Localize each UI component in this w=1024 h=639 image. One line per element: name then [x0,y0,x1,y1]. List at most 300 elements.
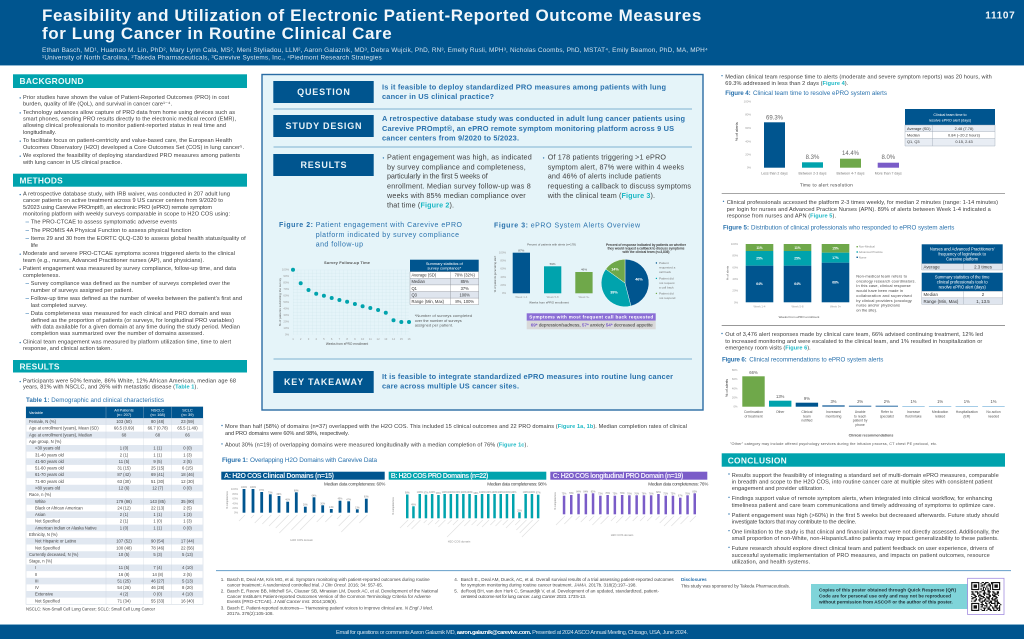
chart: time to alert resolution: 100% [744,100,751,104]
disclosures [681,577,790,589]
chart: B H2O COS PRO domains: 100% [460,491,467,494]
chart: clinical recommendations: of treatment [744,414,763,418]
chart: A H2O COS clinical domains: 20% [232,506,239,510]
references: left column: Basch E, Deal AM, Kris MG, et al. Symptom monitoring with patient-reported outcomes during routine [227,577,430,582]
note: non-medical team [856,274,916,312]
table column: SCLC: 16 (40) [181,598,195,603]
results text: left bullet: that time (Figure 2). [387,201,454,210]
results text: right bullet: Of 178 patients triggering >1 ePRO [548,153,666,162]
chart: survey follow-up time: % of patients submitting the survey [278,278,282,326]
figure 5 title: Figure 5: [723,225,749,232]
bullet text: conclusion: Patient engagement was high (>60%) in the first 5 weeks but decreased afterwards. Future study should [732,513,999,519]
chart: survey follow-up time [278,260,411,346]
table: time to resolve alert: 2.48 (7.78) [955,126,974,131]
chart: callback pie: with the clinical team (n=3,836) [622,250,670,254]
bullet text: methods: Moderate and severe PRO-CTCAE symptoms scores triggered alerts to the clinical [23,251,235,257]
bullet text: methods: Patient engagement was measured by survey compliance, follow-up time, and data [23,266,237,272]
table row labels: I [35,565,36,570]
text block: domain overlap: About 30% (n=19) of overlapping domains were measured longitudinally with a median completion of 76% (Figure 1c). [225,442,528,448]
table column: all patients: 179 (86) [116,499,132,504]
chart: clinical professionals stacked bars: 100% [731,242,739,246]
chart: A H2O COS clinical domains: 46% [285,499,291,502]
figure 1 title: Overlapping H2O Domains with Carevive Data [250,457,377,464]
references: right column: centered outcome set for lung cancer. Lung Cancer 2023. 173:5-13. [461,594,586,599]
chart: A H2O COS clinical domains: Median data completeness: 60% [324,482,385,486]
chart: clinical recommendations: 2% [884,399,890,404]
chart: clinical recommendations: Increased [826,410,841,414]
table row labels: American Indian or Alaska Native [35,525,97,530]
table row labels: Ethnicity, N (%) [29,532,58,537]
table row labels: 71-80 years old [35,479,65,484]
chart: C H2O COS longitudinal PRO domain: 76% [685,492,691,495]
panel: background [13,74,247,166]
chart: percent of patients with alerts: 20% [500,283,507,287]
stacked bar legend: Non-Medical [859,245,875,249]
table column: SCLC: 66 [185,432,190,437]
callout: QR copies notice [811,584,968,609]
chart: time to alert resolution: Between 2-3 days [798,172,827,176]
table column: all patients: 87 (42) [117,472,131,477]
table: survey compliance summary [410,260,479,305]
label: results: RESULTS [300,160,346,170]
chart: time to alert resolution: Less than 2 days [761,172,788,176]
bullet text: background: burden, quality of life (QoL), and survival in cancer care¹⁻⁴. [23,100,172,108]
bullet text: conclusion [728,473,999,566]
chart: clinical recommendations: Continuation [744,410,763,414]
chart: B H2O COS PRO domains: 100% [448,491,455,494]
bullet text: methods: Items 29 and 30 from the EORTC QLQ-C30 to assess global health status/quality of [31,236,246,242]
table column: NSCLC: 80 (48) [151,419,165,424]
table column: NSCLC: 22 (13) [151,505,165,510]
table column: all patients: 63 (30) [117,479,131,484]
figure 2 title: Patient engagement with Carevive ePRO [316,222,463,229]
bullet text: conclusion: timeliness patient and care team communications and timely addressing of symptoms to optimize care. [732,503,995,509]
study design text [382,114,685,142]
table header row: (n= 39) [181,412,194,417]
chart: survey follow-up time: 7 [339,337,341,341]
figure 6 footnote: "Other" category may include offered psychology services during the infusion process, CT chest PE protocol, etc. [730,442,937,446]
study design text: Carevive PROmpt®, an ePRO remote symptom monitoring platform across 9 US [382,124,674,133]
table row labels: III [35,578,38,584]
table 1: demographics [26,407,203,604]
chart: clinical recommendations: team [803,414,811,418]
note: non-medical team: would have been made in [856,288,903,293]
references: left column: 1. [221,577,225,582]
chart: A H2O COS clinical domains: H2O COS domain [290,538,313,542]
bullet text: methods: monitoring platform with weekly surveys comparable in scope to H2O COS using: [23,212,230,218]
results text: left bullet: particularly in the first 5 weeks of [387,172,488,181]
table column: NSCLC: 1 (0) [153,519,163,524]
table footnote: NSCLC: Non-Small Cell Lung Cancer; SCLC: Small Cell Lung Cancer [26,606,156,611]
table row labels: IV [35,585,39,590]
note: non-medical team: nurse and/or physicians [856,303,900,308]
pie legend: a call back [659,285,674,289]
table row labels: 41-50 years old [35,459,65,464]
note: non-medical team: on the site). [856,307,877,312]
text block: domain overlap: and PRO domains were 60% and 98%, respectively. [225,431,349,437]
callout: symptoms with most frequent call back: Symptoms with most frequent call back requested [529,315,653,320]
chart: clinical professionals stacked bars [726,242,883,319]
chart: A H2O COS clinical domains: 13% [355,506,361,509]
chart: clinical recommendations: Refer to [881,410,893,414]
table column: SCLC: 12 (30) [181,479,195,484]
bullet text: methods: life [31,243,38,249]
text block: domain overlap: More than half (58%) of domains (n=37) overlapped with the H2O COS. This included 15 clinical outcomes and 22 PRO domains (Figure 1a, 1b). Median completion rates of clinical [225,424,687,430]
bullet text: results: years, 81% with NSCLC, and 26% with metastatic disease (Table 1). [23,384,198,390]
chart: clinical professionals stacked bars: Weeks From ePRO enrollment [779,315,820,319]
label: key takeaway: KEY TAKEAWAY [284,377,363,387]
references: left column: Events (PRO-CTCAE). J Natl Cancer Inst. 2014;106(9). [227,599,337,604]
bullet text: methods: team (e.g., nurses, Advanced Practitioner nurses (AP), and physicians). [23,258,204,264]
chart: time to alert resolution: 8.3% [806,155,820,161]
table column: all patients: 2 (1) [120,519,129,524]
chart: A H2O COS clinical domains: 100% [241,486,248,489]
disclosures: This study was sponsored by Takeda Pharmaceuticals. [681,584,790,589]
text block: alert responses: emergency room visits (Figure 6). [725,346,811,352]
chart: time to alert resolution [734,100,902,187]
table header row: (n= 207) [117,412,132,417]
bullet text: methods: Survey compliance was defined as the number of surveys completed over the [31,281,230,287]
table column: NSCLC: 7 (4) [153,565,163,570]
chart: B H2O COS PRO domains: 100% [504,491,511,494]
header banner [0,0,1024,66]
panel: results [13,360,247,611]
chart: clinical professionals stacked bars: 80% [732,254,739,258]
results text: left bullet: enrollment. Median survey follow-up was 8 [387,181,531,190]
chart: A H2O COS clinical domains: 49% [338,498,343,501]
references: left column: cancer treatment: A randomized controlled trial. J Clin Oncol. 2016; 34: 557-65. [227,582,383,588]
chart: percent of patients with alerts: 80% [500,258,507,262]
panel: central summary [262,74,703,410]
bullet text: methods: completion was summarized over the number of domains assessed. [31,331,204,337]
chart: survey follow-up time: 13 [384,337,388,341]
bullet text: background: We explored the feasibility of deploying standardized PRO measures among patients [23,153,240,159]
table column: NSCLC: 0 (0) [153,592,163,597]
figure 4 title: Figure 4: [725,90,751,97]
chart: survey follow-up time: 16 [407,337,411,341]
table column: NSCLC: 12 (7) [152,486,164,490]
bullet text: conclusion: in breadth and scope to the H2O COS, into routine cancer care at multiple sites with consistent patient [732,480,993,486]
note: non-medical team: In this case, clinical response [856,283,911,288]
bullet text: background: Outcomes Observatory (H2O) developed a Core Outcomes Set (COS) in lung cancer⁵. [23,144,244,151]
chart: time to alert resolution: 0% [747,166,751,170]
table: time to resolve alert, clinical professionals: resolve ePRO alert (days) [939,284,986,289]
references: right column: 4. [454,577,458,582]
label: key takeaway [273,371,374,393]
chart: B H2O COS PRO domains: 49% [411,503,417,506]
question text: Is it feasible to deploy standardized PRO measures among patients with lung [382,82,666,92]
table row labels: Not Specified [35,598,61,603]
results text: left bullet [383,153,532,210]
chart: C H2O COS longitudinal PRO domain: 76% [642,492,647,495]
table: survey compliance summary: Range (Min, Max) [412,299,445,304]
table column: NSCLC: 46 (28) [151,585,165,590]
chart: time to alert resolution: 69.3% [766,115,784,121]
bullet text: methods: number of surveys assigned per patient. [31,288,133,294]
chart: C H2O COS longitudinal PRO domain: 78% [569,492,575,495]
table header row: Variable [29,410,43,415]
table column: all patients: 66.5 (0.69) [114,426,135,431]
chart: C H2O COS longitudinal PRO domain: C: H2O COS longitudinal PRO Domain (n=19) [553,473,683,480]
pie legend: not respond [659,296,676,300]
question text: cancer in US clinical practice? [382,92,494,101]
chart: survey follow-up time: 9 [354,337,356,341]
chart: time to alert resolution: More than 7 days [875,172,902,176]
chart: percent of patients with alerts: Week 5-8 [547,295,559,299]
chart: clinical professionals stacked bars: % of alerts [726,265,730,280]
callout: QR copies notice: Code are for personal use only and may not be reproduced [819,594,951,599]
table column: all patients: 12 (6) [119,486,130,490]
chart: clinical recommendations: Increase [907,410,920,414]
table: time to resolve alert [905,109,995,146]
chart: callback pie: Percent of response indicated by patients on whether [606,243,687,247]
references: right column: 5. [454,588,458,594]
chart: A H2O COS clinical domains: 64% [312,494,317,497]
chart: B H2O COS PRO domains: 97% [536,492,541,495]
chart: callback pie [601,243,687,307]
table column: SCLC: 2 (5) [183,505,192,510]
figure 6 title: Figure 6: [722,356,747,363]
chart: A H2O COS clinical domains: 100% [250,486,257,489]
references: left column: Basch E. Patient-reported outcomes— 'Harnessing patient' voices to improve clinical are. N Engl J Med. [227,606,433,610]
table column: SCLC: 5 (13) [182,552,194,557]
chart: time to alert resolution: 14.4% [842,151,860,157]
chart: survey follow-up time: 8 [346,337,348,341]
chart: B H2O COS PRO domains: H2O COS domain [448,539,471,543]
callout: QR copies notice: Copies of this poster obtained through Quick Response (QR) [819,588,956,593]
chart: percent of patients with alerts: Percent of patients with alerts (n=178) [527,242,576,246]
chart: B H2O COS PRO domains: 96% [436,492,442,495]
chart: C H2O COS longitudinal PRO domain: Median data completeness: 76% [648,482,708,486]
chart: B H2O COS PRO domains: 100% [498,491,505,494]
table column: SCLC: 17 (44) [181,539,195,544]
chart: clinical recommendations: specialist [880,414,894,418]
bullet text: methods: Data completeness was measured for each clinical and PRO domain and was [31,311,231,317]
callout: QR copies notice: without permission from ASCO® or the author of this poster. [818,598,953,604]
chart: clinical recommendations: 2% [857,399,863,404]
heading: conclusion: CONCLUSION [728,455,787,465]
study design text: cancer centers from 9/2020 to 5/2023. [382,134,519,142]
figure 2 title: platform indicated by survey compliance [316,232,459,239]
chart: survey follow-up time: 3 [308,337,310,341]
table column: SCLC: 0 (0) [183,486,192,490]
chart: clinical recommendations: notified [801,419,812,423]
chart: time to alert resolution: 40% [745,139,751,143]
results text: right bullet [543,153,691,200]
note: non-medical team: oncology research coordinators. [856,278,916,283]
table row labels: 61-70 years old [35,472,65,477]
study design text: A retrospective database study was conducted in adult lung cancer patients using [382,114,685,123]
table: survey compliance summary: 8%, 100% [455,299,474,304]
chart: A H2O COS clinical domains: 47% [346,498,352,501]
table: survey compliance summary: 100% [459,292,470,297]
chart: C H2O COS longitudinal PRO domain: 75% [671,493,676,496]
table column: all patients: 31 (15) [117,466,131,471]
table column: all patients: 68 [122,432,127,437]
chart: A H2O COS clinical domains: 26% [303,504,309,507]
text block: clinical professionals [723,200,998,220]
bullet text: results [20,378,236,390]
table column: NSCLC: 14 (8) [152,572,164,577]
chart: survey follow-up time: 1 [292,337,294,341]
chart: clinical professionals stacked bars: Week 9+ [830,304,841,308]
label: question: QUESTION [297,87,350,97]
table row labels: Black or African American [35,505,83,510]
chart: C H2O COS longitudinal PRO domain: 75% [613,493,618,496]
chart: B H2O COS PRO domains: 97% [424,492,429,495]
poster number: 11107 [985,10,1015,22]
bullet text: conclusion: One limitation to the study is that clinical and financial impact were not directly assessed. Additionally, the [732,530,999,536]
chart: clinical professionals stacked bars: 25% [794,257,801,261]
chart: survey follow-up time: 6 [331,337,333,341]
table column: SCLC: 5 (13) [182,578,194,584]
chart: clinical professionals stacked bars: 68% [832,281,839,285]
table: login frequency: Average [924,264,940,269]
chart: clinical recommendations: Hospitalization [956,410,978,414]
chart: survey follow-up time: 11 [369,337,372,341]
title: Feasibility and Utilization of Electronic Patient-Reported Outcome Measures [42,6,701,25]
survey compliance footnote [415,313,472,328]
pie legend [656,261,676,300]
stacked bar legend: Advanced Practice [859,250,883,254]
table row labels: >80 years old [35,486,61,490]
table column: SCLC: 18 (46) [181,472,195,477]
chart: clinical professionals stacked bars: 20% [732,289,739,293]
chart: clinical recommendations: 20% [732,396,738,400]
table column: all patients: 16 (8) [119,572,130,577]
chart: survey follow-up time: 80% [283,281,290,285]
bullet text: methods: with data available for a given domain at any time during the study period. Median [30,324,240,330]
chart: clinical professionals stacked bars: Week 1-4 [754,304,766,308]
key takeaway text: care across multiple US cancer sites. [382,382,519,390]
chart: B H2O COS PRO domains: 100% [429,491,436,494]
heading: methods: METHODS [20,175,63,185]
chart: clinical recommendations: needed [988,414,999,418]
chart: B H2O COS PRO domains: 100% [492,491,499,494]
chart: clinical professionals stacked bars: 17% [832,256,839,260]
chart: A H2O COS clinical domains: 80% [232,492,239,496]
label: results [273,154,374,176]
table: login frequency [922,244,1003,270]
chart: clinical recommendations: phone [855,423,865,427]
table: login frequency: Nurses and Advanced Practitioners' [930,246,995,251]
chart: clinical professionals stacked bars: 15% [832,247,839,251]
chart: C H2O COS longitudinal PRO domain: 85% [591,490,596,493]
table row labels: 51-60 years old [35,466,65,471]
chart: clinical recommendations: 80% [732,368,738,372]
chart: B H2O COS PRO domains: 100% [454,491,461,494]
chart: survey follow-up time: 0% [285,333,290,337]
figure 2 title [279,222,463,248]
chart: C H2O COS longitudinal PRO domain: 67% [678,495,684,498]
chart: time to alert resolution: 20% [745,153,751,157]
disclosures: Disclosures [681,577,707,582]
table column: SCLC [177,419,198,603]
table: time to resolve alert: Median [907,132,920,137]
chart: survey follow-up time: Survey Follow-up Time [324,260,371,265]
chart: time to alert resolution: 8.0% [881,155,896,161]
pie legend: requested a [659,266,676,270]
chart: B H2O COS PRO domains: 100% [510,491,517,494]
footer contact text: Email for questions or comments Aaron Galaznik MD, aaron.galaznik@carevive.com. Presented at 2024 ASCO Annual Meeting, Chicago, USA, June 2024. [336,630,688,636]
chart: percent of patients with alerts: Weeks from ePRO enrollment [529,300,569,304]
table: time to resolve alert, clinical professionals [922,273,1003,304]
table column: all patients: 11 (5) [119,459,130,464]
chart: survey follow-up time: 10 [361,337,365,341]
key takeaway text: It is feasible to integrate standardized ePRO measures into routine lung cancer [382,372,673,381]
table column: all patients: 1 (0) [120,446,129,451]
table column: NSCLC: 51 (30) [151,479,165,484]
chart: time to alert resolution: Time to alert resolution [800,182,853,187]
table: time to resolve alert, clinical professionals: 1, 13.5 [976,299,990,304]
table column: NSCLC: 66.7 (0.78) [148,426,168,431]
references: left column: 2. [221,588,225,594]
chart: clinical recommendations: Clinical recommendations [849,433,893,437]
table: time to resolve alert: Clinical team time to [933,113,967,117]
table header row: (n= 168) [150,412,166,417]
figure 6 title: Clinical recommendations to ePRO system alerts [749,356,883,363]
text block: response time [721,74,992,87]
chart: percent of patients with alerts: Week 1-4 [515,295,528,299]
table column: SCLC: 0 (0) [183,525,192,530]
table: survey compliance summary: Q3 [412,292,418,297]
table row labels: <30 years old [35,446,61,451]
chart: clinical recommendations: monitoring [826,414,842,418]
bullet text: methods: A retrospective database study, with IRB waiver, was conducted in 207 adult lung [23,192,230,198]
text block: alert responses [721,332,983,352]
chart: survey follow-up time: 70% [283,287,290,291]
chart: callback pie: they would request a callback to discuss symptoms [608,247,685,251]
chart: C H2O COS longitudinal PRO domain [550,472,708,537]
chart: B H2O COS PRO domains: 100% [529,491,536,494]
table column: SCLC: 1 (3) [183,452,192,457]
table: time to resolve alert: 0.84 (~20.2 hours) [948,132,981,137]
chart: B H2O COS PRO domains: Median data completeness: 98% [487,482,547,486]
bullet text: methods: defined as the proportion of patients (or surveys, for longitudinal PRO variables) [31,318,234,324]
bullet text: methods: completeness. [23,273,60,279]
table: survey compliance summary: 37% [461,286,469,291]
table: time to resolve alert, clinical professionals: clinical professionals took to [937,280,988,284]
table column: NSCLC [148,419,168,603]
survey compliance footnote: over the number of surveys [415,318,462,323]
chart: clinical professionals stacked bars: Week 5-8 [792,304,804,308]
chart: survey follow-up time: 20% [283,320,290,324]
table column: SCLC: 65.5 (1.49) [177,426,198,431]
table: survey compliance summary: Summary statistics of [426,261,464,266]
chart: B H2O COS PRO domains: 100% [485,491,492,494]
chart: survey follow-up time: 10% [283,326,290,330]
authors and affiliations: ¹University of North Carolina, ²Takeda Pharmaceuticals, ³Carevive Systems, Inc., ⁴Piedmont Research Strategies [42,55,382,62]
chart: percent of patients with alerts: 0% [502,291,507,295]
chart: C H2O COS longitudinal PRO domain: 75% [562,493,567,496]
bullet text: conclusion: engagement and provider utilization. [732,486,824,492]
table: survey compliance summary: 70% (32%) [455,273,475,278]
chart: survey follow-up time: 40% [283,307,290,311]
bullet text: methods: 5/2023 using Carevive PROmpt®, an electronic PRO (ePRO) remote symptom [23,204,212,211]
bullet text: background: longitudinally. [23,130,56,136]
table header row: NSCLC [151,408,164,412]
results text: right bullet: requesting a callback to discuss symptoms [548,181,691,190]
chart: B H2O COS PRO domains: 98% [405,492,411,494]
table row labels: Age group, N (%) [29,439,62,444]
figure 4 title: Clinical team time to resolve ePRO system alerts [753,90,887,97]
bullet text: conclusion: small proportion of non-White, non-Hispanic/Latino patients may impact generalizability to these patients. [732,536,999,542]
chart: B H2O COS PRO domains: 100% [523,491,530,494]
table column: NSCLC: 25 (15) [151,466,165,471]
chart: survey follow-up time: 50% [283,300,290,304]
chart: clinical recommendations: fluid intake [905,414,922,418]
chart: survey follow-up time: 4 [315,337,317,341]
